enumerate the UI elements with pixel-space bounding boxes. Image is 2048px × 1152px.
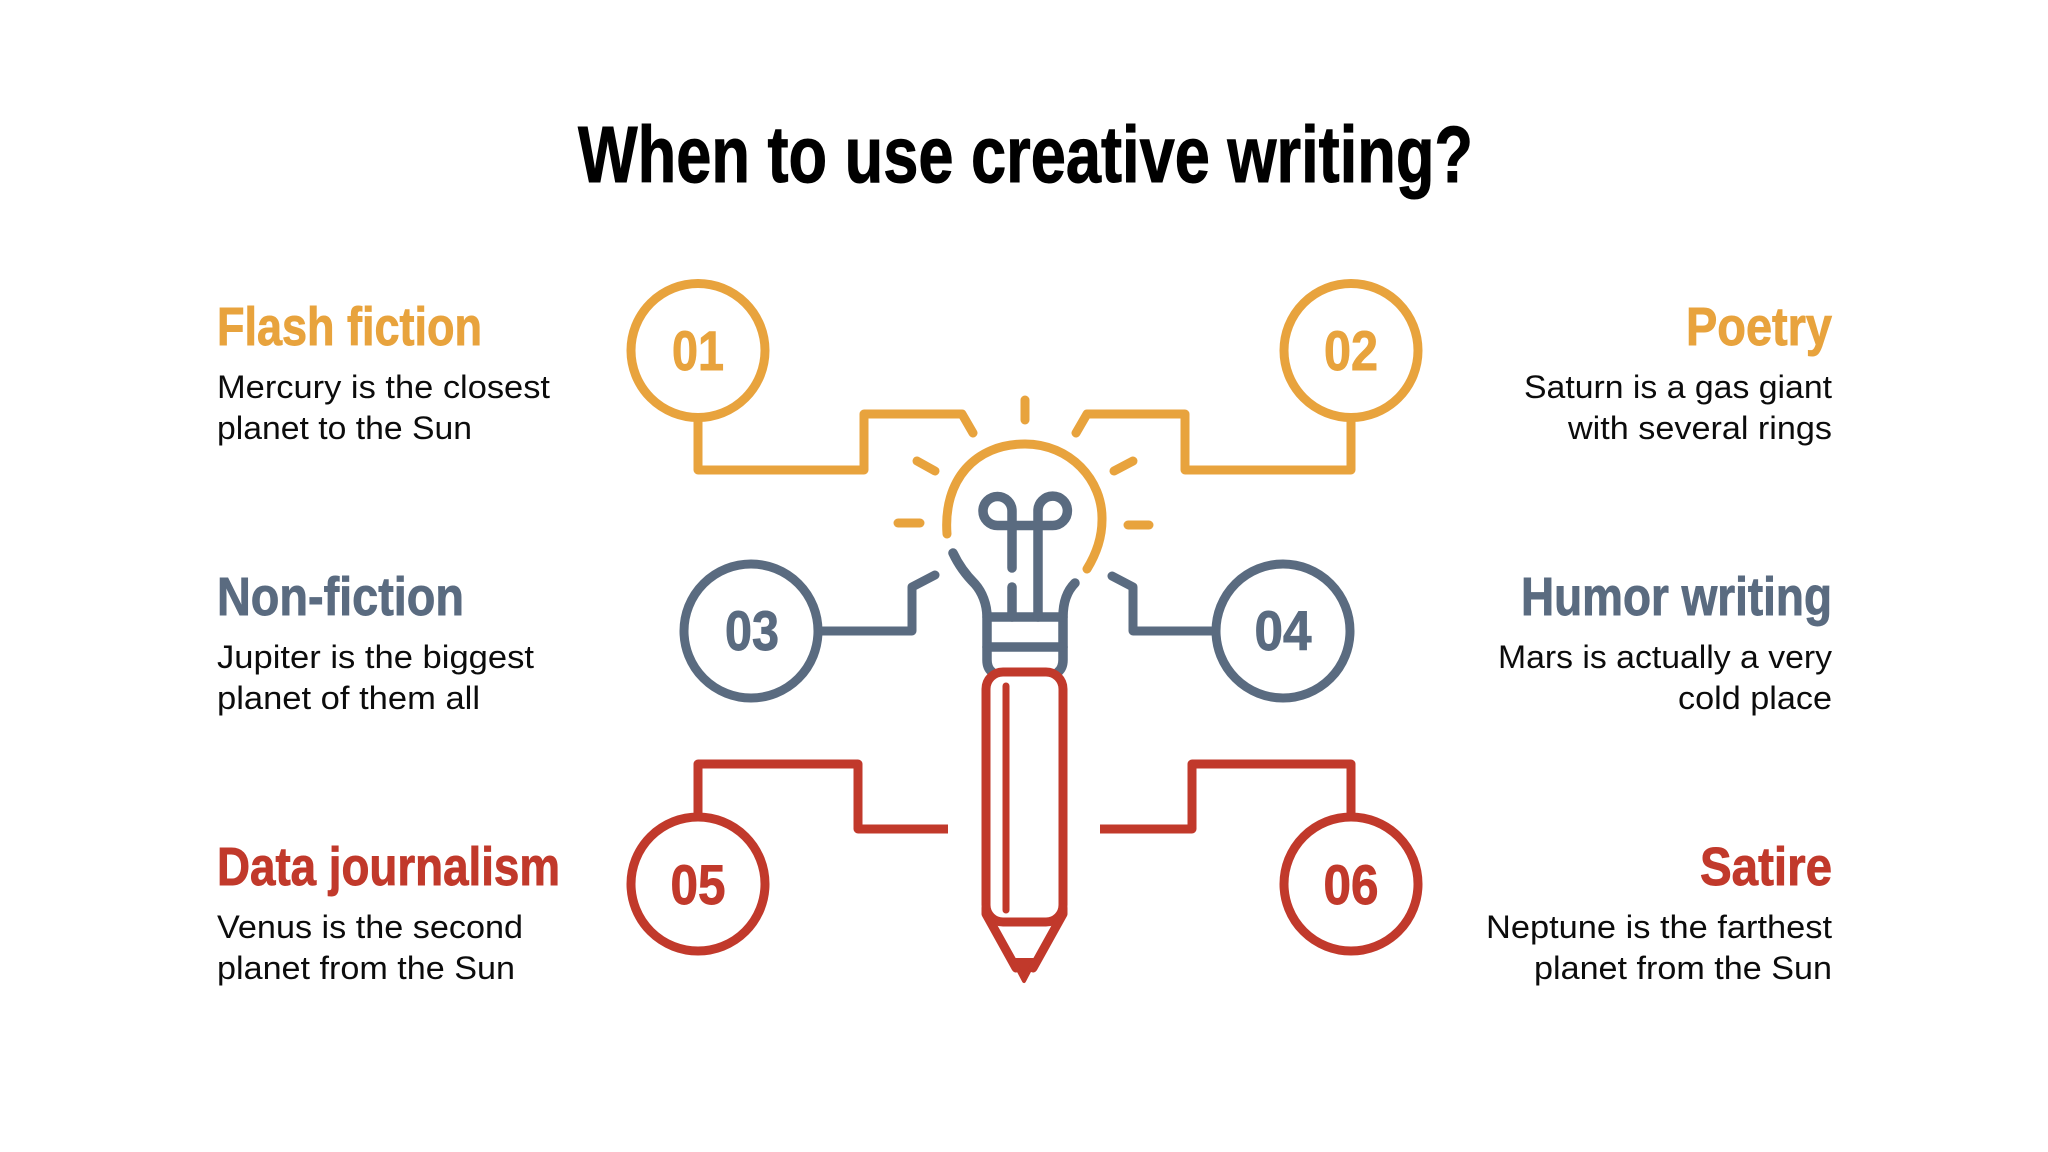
- text block: Data journalism: Venus is the second: [217, 909, 523, 945]
- icon: light bulb base and filament: [953, 496, 1075, 672]
- number circle 05: 05: [670, 853, 726, 916]
- text block: Flash fiction: planet to the Sun: [217, 410, 472, 446]
- text block: Satire: Satire: [1700, 837, 1832, 897]
- connector 03: [819, 575, 935, 631]
- text block: Humor writing: [1498, 567, 1832, 716]
- text block: Humor writing: cold place: [1678, 680, 1832, 716]
- number circle 01: [631, 284, 765, 418]
- connector 04: [1112, 576, 1215, 631]
- connector 06: [1100, 764, 1351, 829]
- number circle 06: [1284, 817, 1418, 951]
- number circle 02: [1284, 284, 1418, 418]
- text block: Poetry: Saturn is a gas giant: [1524, 369, 1832, 405]
- text block: Flash fiction: [217, 297, 550, 446]
- text block: Flash fiction: Mercury is the closest: [217, 369, 550, 405]
- connector 05: [698, 764, 948, 829]
- text block: Non-fiction: [217, 567, 534, 716]
- text block: Non-fiction: Jupiter is the biggest: [217, 639, 534, 675]
- number circle 04: [1216, 564, 1350, 698]
- icon: light rays: [898, 400, 1149, 525]
- number circle 04: 04: [1254, 599, 1312, 662]
- number circle 02: 02: [1324, 319, 1378, 382]
- text block: Humor writing: Mars is actually a very: [1498, 639, 1832, 675]
- number circle 05: [631, 817, 765, 951]
- icon: light bulb glass: [947, 444, 1102, 569]
- number circle 01: 01: [672, 319, 724, 382]
- number circle 03: [684, 564, 818, 698]
- text block: Satire: planet from the Sun: [1534, 950, 1832, 986]
- text block: Poetry: [1524, 297, 1832, 446]
- text block: Non-fiction: planet of them all: [217, 680, 480, 716]
- text block: Humor writing: Humor writing: [1521, 567, 1832, 627]
- text block: Satire: Neptune is the farthest: [1486, 909, 1832, 945]
- text block: Data journalism: planet from the Sun: [217, 950, 515, 986]
- text block: Data journalism: Data journalism: [217, 837, 560, 897]
- text block: Poetry: with several rings: [1567, 410, 1832, 446]
- number circle 06: 06: [1324, 853, 1378, 916]
- title: When to use creative writing?: [578, 110, 1473, 199]
- connector 02: [1076, 414, 1351, 470]
- text block: Flash fiction: Flash fiction: [217, 297, 482, 357]
- text block: Non-fiction: Non-fiction: [217, 567, 464, 627]
- number circle 03: 03: [725, 599, 779, 662]
- text block: Poetry: Poetry: [1686, 297, 1832, 357]
- connector 01: [698, 414, 973, 470]
- icon: pencil: [986, 672, 1063, 981]
- text block: Satire: [1486, 837, 1832, 986]
- text block: Data journalism: [217, 837, 560, 986]
